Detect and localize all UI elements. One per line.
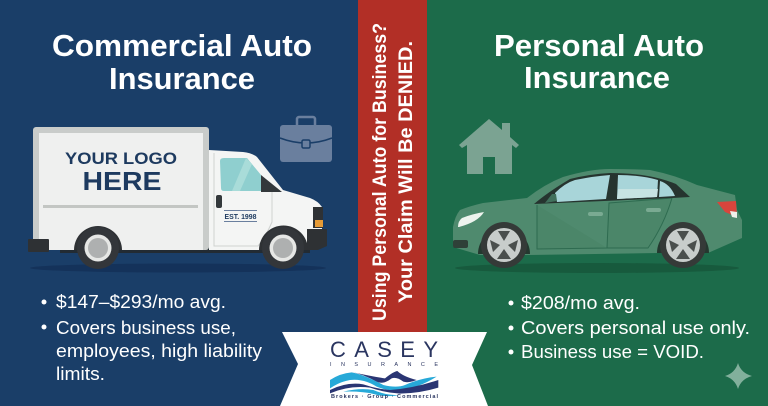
heading: commercial auto insurance: Insurance	[109, 61, 255, 96]
icon: green sedan	[453, 169, 742, 273]
bullet list: commercial: limits.	[56, 363, 105, 384]
bullet list: personal: Covers personal use only.	[521, 317, 750, 338]
heading: commercial auto insurance	[52, 28, 312, 96]
logo waves	[330, 371, 438, 396]
heading: personal auto insurance: Insurance	[524, 60, 670, 95]
icon: sparkle	[725, 363, 752, 389]
panel: personal background	[427, 0, 768, 406]
bullet list: personal	[508, 292, 750, 362]
truck door badge: EST. 1998	[224, 214, 257, 221]
truck logo text: HERE	[82, 166, 162, 196]
icon: delivery truck	[28, 127, 327, 272]
bullet list: commercial: Covers business use,	[56, 317, 236, 338]
icon: house	[459, 119, 519, 174]
panel: commercial background	[0, 0, 358, 406]
logo tagline: Brokers · Group · Commercial	[331, 394, 438, 400]
heading: personal auto insurance: Personal Auto	[494, 28, 704, 63]
truck door badge	[224, 210, 257, 222]
bullet list: personal: $208/mo avg.	[521, 292, 640, 313]
truck logo text: YOUR LOGO	[65, 149, 177, 168]
bullet list: personal: Business use = VOID.	[521, 341, 704, 362]
logo wordmark casey: CASEY	[330, 337, 438, 362]
truck logo text	[65, 149, 177, 196]
panel: red center column	[358, 0, 427, 406]
logo banner	[280, 332, 488, 406]
vertical warning text: Using Personal Auto for Business?	[369, 23, 391, 321]
icon: briefcase	[280, 117, 332, 162]
bullet list: commercial: employees, high liability	[56, 340, 263, 361]
bullet list: commercial	[42, 291, 263, 384]
heading: personal auto insurance	[494, 28, 704, 95]
vertical warning text: Your Claim Will Be DENIED.	[395, 41, 417, 303]
vertical warning text	[369, 23, 417, 321]
heading: commercial auto insurance: Commercial Auto	[52, 28, 312, 63]
bullet list: commercial: $147–$293/mo avg.	[56, 291, 226, 312]
logo wordmark insurance: INSURANCE	[330, 362, 438, 368]
